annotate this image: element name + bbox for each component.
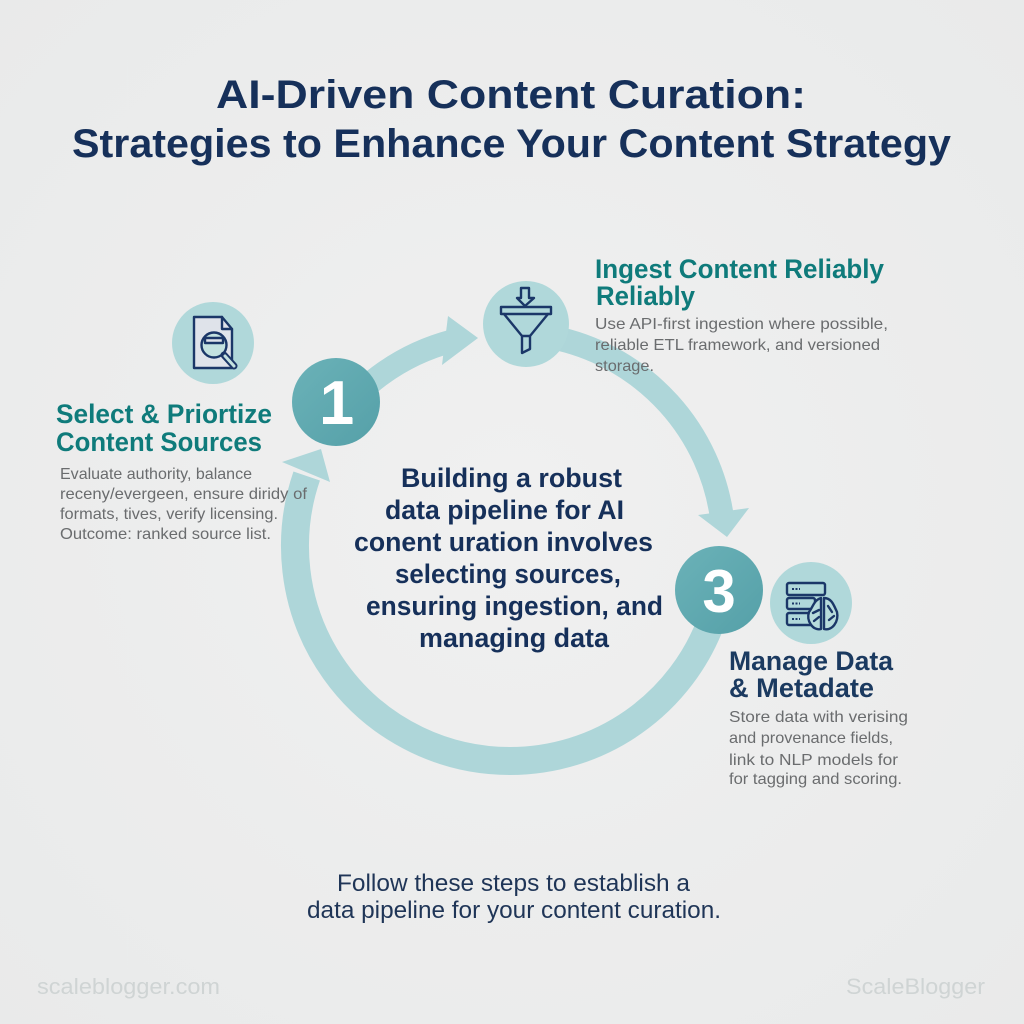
description: and provenance fields, [729, 730, 893, 747]
description: receny/evergeen, ensure diridy of [60, 486, 308, 503]
arrow: ingest to step 3 [560, 339, 749, 537]
description: link to NLP models for [729, 752, 899, 769]
description [595, 316, 888, 375]
center summary text: ensuring ingestion, and [366, 591, 663, 621]
description: reliable ETL framework, and versioned [595, 337, 880, 354]
description: Outcome: ranked source list. [60, 526, 271, 543]
closing note: data pipeline for your content curation. [307, 897, 721, 924]
center summary text: conent uration involves [354, 527, 653, 557]
step number 3: 3 [702, 558, 736, 625]
description: Evaluate authority, balance [60, 466, 252, 483]
center summary text: selecting sources, [395, 559, 621, 589]
icon: funnel [483, 281, 569, 367]
center summary text: data pipeline for AI [385, 495, 624, 525]
description: for tagging and scoring. [729, 771, 902, 788]
heading: & Metadate [729, 673, 874, 703]
heading: Select & Priortize [56, 399, 272, 429]
heading: Content Sources [56, 427, 262, 457]
heading: Ingest Content Reliably [595, 254, 884, 284]
step number 3 [675, 546, 763, 634]
closing note [307, 870, 721, 924]
description [729, 709, 908, 788]
step number 1: 1 [320, 369, 354, 438]
center summary text: Building a robust [401, 463, 622, 493]
arrow: step 3 back to step 1 [282, 449, 712, 761]
step: manage data [729, 646, 908, 788]
closing note: Follow these steps to establish a [337, 870, 691, 897]
description: Store data with verising [729, 709, 908, 726]
description: storage. [595, 358, 654, 375]
heading [729, 646, 894, 703]
footer url: scaleblogger.com [37, 974, 220, 999]
icon: database and brain [770, 562, 852, 644]
description: Use API-first ingestion where possible, [595, 316, 888, 333]
footer brand: ScaleBlogger [846, 974, 985, 999]
icon: document search [172, 302, 254, 384]
heading: Manage Data [729, 646, 894, 676]
arrow: step 1 to ingest [368, 316, 478, 385]
heading [595, 254, 884, 311]
heading [56, 399, 272, 457]
step number 1 [292, 358, 380, 446]
center summary text: managing data [419, 623, 610, 653]
step: select and prioritize [56, 399, 308, 543]
title: AI-Driven Content Curation: [216, 73, 806, 117]
center summary text [354, 463, 663, 653]
cycle diagram [282, 316, 763, 761]
title: Strategies to Enhance Your Content Strategy [72, 122, 952, 166]
title [72, 73, 952, 166]
step: ingest content [595, 254, 888, 375]
description: formats, tives, verify licensing. [60, 506, 278, 523]
heading: Reliably [596, 281, 695, 311]
description [60, 466, 308, 543]
